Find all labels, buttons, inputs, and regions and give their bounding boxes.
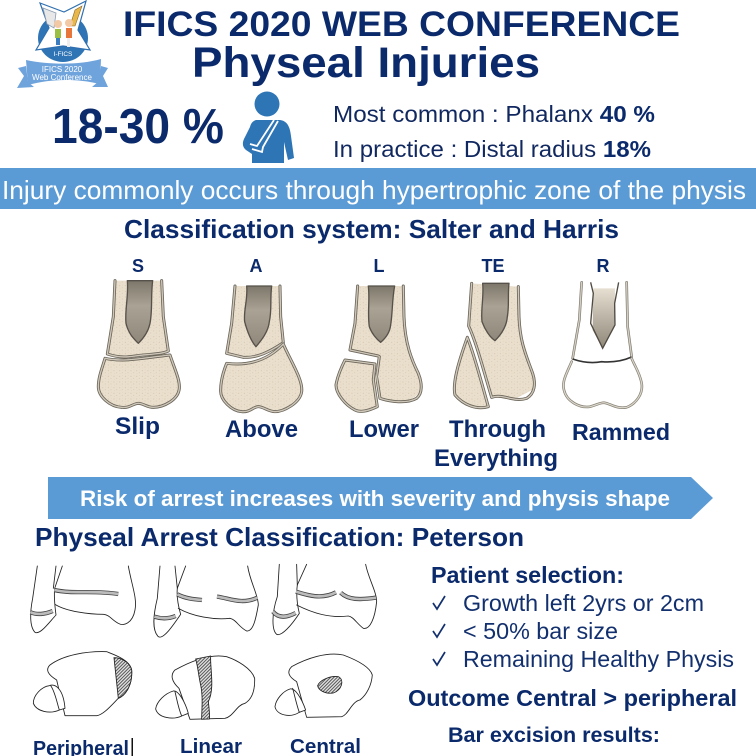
heading: patient selection: Patient selection: xyxy=(431,562,624,588)
subtitle: Physeal Injuries xyxy=(192,39,540,87)
bone: slip xyxy=(98,281,179,407)
letter S: S xyxy=(132,256,144,276)
bone: rammed xyxy=(563,282,642,408)
diagram: peripheral xyxy=(31,566,136,716)
letter L: L xyxy=(374,256,384,276)
stat: most common: Most common : Phalanx 40 % xyxy=(333,101,655,127)
letter A: A xyxy=(250,256,262,276)
logo: IFICS 2020 Web Conference: I-FICS xyxy=(54,51,73,58)
statistic: 18-30 %: 18-30 % xyxy=(52,100,224,154)
label: lower: Lower xyxy=(349,416,419,443)
text: bar excision results: Bar excision results: xyxy=(448,723,660,747)
letters TE: TE xyxy=(481,256,505,276)
banner: hypertrophic zone: Injury commonly occurs through hypertrophic zone of the physis xyxy=(2,175,746,205)
panel: Peterson diagrams xyxy=(31,564,377,719)
checklist item: healthy physis: Remaining Healthy Physis xyxy=(463,646,734,672)
bone: through everything xyxy=(454,283,535,408)
bone: lower xyxy=(336,286,422,411)
bone: above xyxy=(221,286,302,412)
panel: patient selection xyxy=(431,562,734,672)
heading: Peterson classification: Physeal Arrest Classification: Peterson xyxy=(35,522,524,552)
label: through everything: Everything xyxy=(434,445,558,472)
arrow: risk of arrest xyxy=(48,477,713,519)
logo: IFICS 2020 Web Conference: Web Conference xyxy=(32,73,92,82)
diagram: central xyxy=(273,564,377,717)
arrow: risk of arrest: Risk of arrest increases with severity and physis shape xyxy=(80,486,670,511)
checklist item: bar size: < 50% bar size xyxy=(463,618,618,644)
icon: person with arm sling xyxy=(243,92,294,163)
stat: in practice: In practice : Distal radius 18% xyxy=(333,136,651,162)
diagram: linear xyxy=(154,566,258,719)
text: outcome: Outcome Central > peripheral xyxy=(408,685,737,711)
panel: Salter-Harris diagrams xyxy=(98,256,670,472)
heading: classification system: Classification system: Salter and Harris xyxy=(124,214,619,244)
label: through everything: Through xyxy=(449,416,546,443)
logo: IFICS 2020 Web Conference: IFICS 2020 xyxy=(42,65,83,74)
title: IFICS 2020 WEB CONFERENCE xyxy=(123,5,680,44)
logo: IFICS 2020 Web Conference xyxy=(17,1,108,88)
checklist item: growth left: Growth left 2yrs or 2cm xyxy=(463,590,704,616)
label: above: Above xyxy=(225,416,298,443)
letter R: R xyxy=(596,256,610,276)
label: slip: Slip xyxy=(115,413,160,440)
label: rammed: Rammed xyxy=(572,419,670,445)
